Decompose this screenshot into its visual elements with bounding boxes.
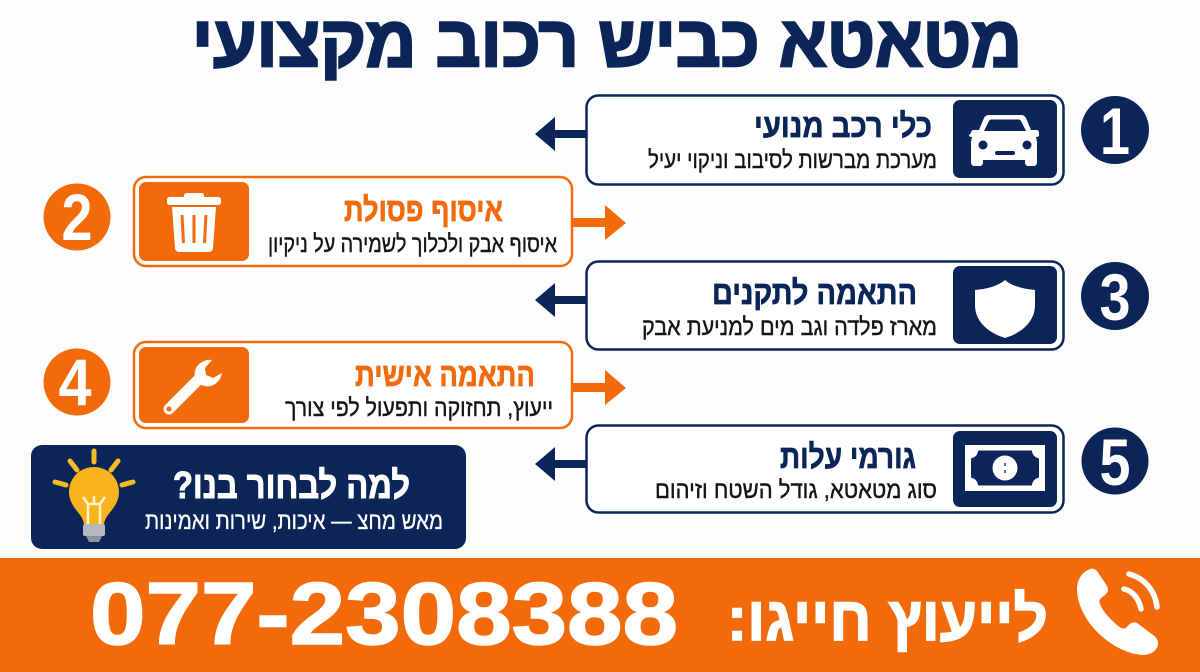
call to action: לייעוץ חייגו: (727, 585, 1048, 654)
arrow: step 4 (572, 370, 626, 405)
card: step 3 (586, 262, 1064, 350)
number 5 (1082, 425, 1148, 499)
panel: step 2 (44, 177, 626, 266)
footer banner (0, 558, 1200, 672)
text: why choose us: מאש מחצ — איכות, שירות ואמינות (145, 508, 443, 535)
text: step 2: איסוף אבק ולכלוך לשמירה על ניקיון (268, 231, 557, 258)
heading: step 3: התאמה לתקנים (712, 274, 917, 311)
number 1: 1 (1100, 94, 1130, 168)
number 3: 3 (1100, 260, 1130, 334)
heading: step 2: איסוף פסולת (344, 191, 503, 228)
arrow: step 2 (572, 205, 626, 240)
panel: step 1 (535, 94, 1149, 184)
number 3 (1081, 260, 1149, 334)
icon: banknote (953, 431, 1057, 507)
panel: why choose us (31, 445, 466, 549)
card: step 4 (134, 342, 572, 428)
number 2 (44, 180, 110, 254)
arrow: step 5 (535, 447, 586, 481)
number 2: 2 (62, 180, 92, 254)
icon: car (953, 100, 1057, 178)
icon: phone (1077, 569, 1158, 655)
heading: step 1: כלי רכב מנועי (754, 107, 932, 144)
heading: step 4: התאמה אישית (355, 356, 535, 393)
number 4 (44, 345, 110, 419)
heading: step 5: גורמי עלות (780, 438, 916, 475)
title: מטאטא כביש רכוב מקצועי (192, 2, 1022, 82)
arrow: step 1 (535, 117, 586, 151)
number 1 (1081, 94, 1149, 168)
panel: step 5 (535, 425, 1148, 512)
footer background (0, 558, 1200, 672)
card: step 5 (586, 426, 1064, 512)
panel: step 3 (535, 260, 1149, 350)
text: step 1: מערכת מברשות לסיבוב וניקוי יעיל (648, 147, 937, 174)
number 4: 4 (58, 345, 92, 419)
text: step 5: סוג מטאטא, גודל השטח וזיהום (655, 477, 937, 504)
icon: wrench (139, 347, 249, 423)
icon: shield (953, 266, 1057, 344)
phone number: 077-2308388 (90, 564, 678, 663)
icon: trash can (139, 182, 249, 261)
heading: why choose us: למה לבחור בנו? (173, 465, 410, 507)
card: step 2 (134, 177, 572, 266)
text: step 3: מארז פלדה וגב מים למניעת אבק (642, 314, 937, 341)
arrow: step 3 (535, 283, 586, 317)
card: step 1 (586, 96, 1064, 184)
panel background (31, 445, 466, 549)
text: step 4: ייעוץ, תחזוקה ותפעול לפי צורך (285, 395, 553, 422)
number 5: 5 (1100, 425, 1130, 499)
icon: light bulb (55, 451, 133, 542)
panel: step 4 (44, 342, 626, 428)
